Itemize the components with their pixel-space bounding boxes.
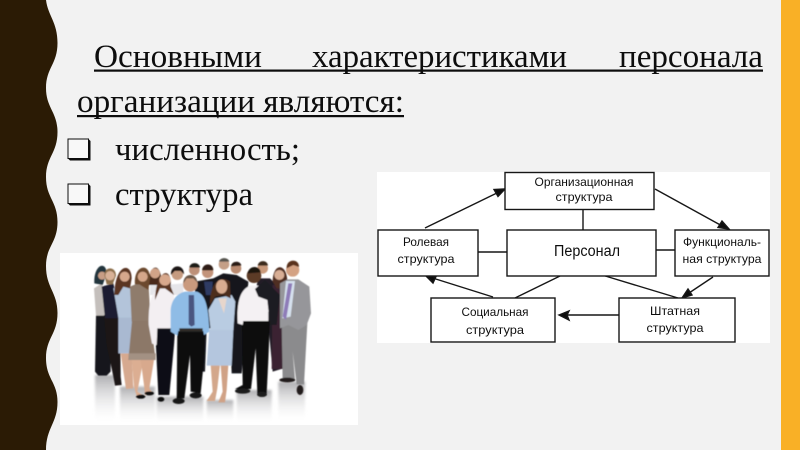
box: organizational structure: Организационная xyxy=(534,175,634,189)
arrow: organizational to functional structure xyxy=(655,189,729,229)
box: personnel: Персонал xyxy=(554,243,620,260)
bullet item: структура: структура xyxy=(115,177,253,213)
heading text: characteristics of personnel: Основными xyxy=(94,39,262,75)
man with jacket on shoulder xyxy=(235,267,280,397)
box: staffing structure xyxy=(619,298,735,342)
diagram: personnel structure xyxy=(377,172,770,343)
arrow: staffing to social structure xyxy=(559,311,619,320)
central man with blue shirt xyxy=(171,275,209,404)
bullet list xyxy=(68,132,300,213)
arrow: role to organizational structure xyxy=(425,189,505,228)
box: staffing structure: структура xyxy=(646,321,704,335)
bullet item: численность: численность; xyxy=(115,132,300,168)
heading text: characteristics of personnel: персонала xyxy=(619,39,763,75)
box: functional structure xyxy=(675,230,769,276)
heading text: characteristics of personnel: характеристиками xyxy=(312,39,567,75)
photo: group of office workers xyxy=(60,253,358,425)
woman far left xyxy=(94,266,111,376)
heading text: characteristics of personnel: организации являются: xyxy=(77,84,404,120)
box: personnel xyxy=(507,230,656,276)
woman in white shirt xyxy=(149,273,176,402)
box: functional structure: Функциональ- xyxy=(683,235,761,249)
woman in taupe suit xyxy=(128,268,156,399)
box: role structure xyxy=(378,230,478,276)
arrow: functional to staffing structure xyxy=(682,277,713,298)
box: organizational structure xyxy=(505,172,654,210)
box: social structure: Социальная xyxy=(462,305,528,319)
heading text: characteristics of personnel xyxy=(77,39,763,120)
back row xyxy=(149,258,287,373)
box: role structure: Ролевая xyxy=(403,235,449,249)
woman in light-blue jacket xyxy=(113,268,134,389)
left wavy dark band xyxy=(0,0,58,450)
box: staffing structure: Штатная xyxy=(650,304,700,318)
box: organizational structure: структура xyxy=(556,190,613,204)
box: social structure: структура xyxy=(466,323,524,337)
connector lines xyxy=(478,209,678,298)
woman in pale blue suit xyxy=(207,279,235,402)
arrow: social to role structure xyxy=(426,276,493,297)
box: social structure xyxy=(431,298,555,342)
right orange band xyxy=(781,0,800,450)
woman in navy xyxy=(102,268,122,386)
floor reflection xyxy=(95,375,305,425)
man in grey suit xyxy=(279,261,311,395)
box: functional structure: ная структура xyxy=(682,252,762,266)
box: role structure: структура xyxy=(398,252,455,266)
